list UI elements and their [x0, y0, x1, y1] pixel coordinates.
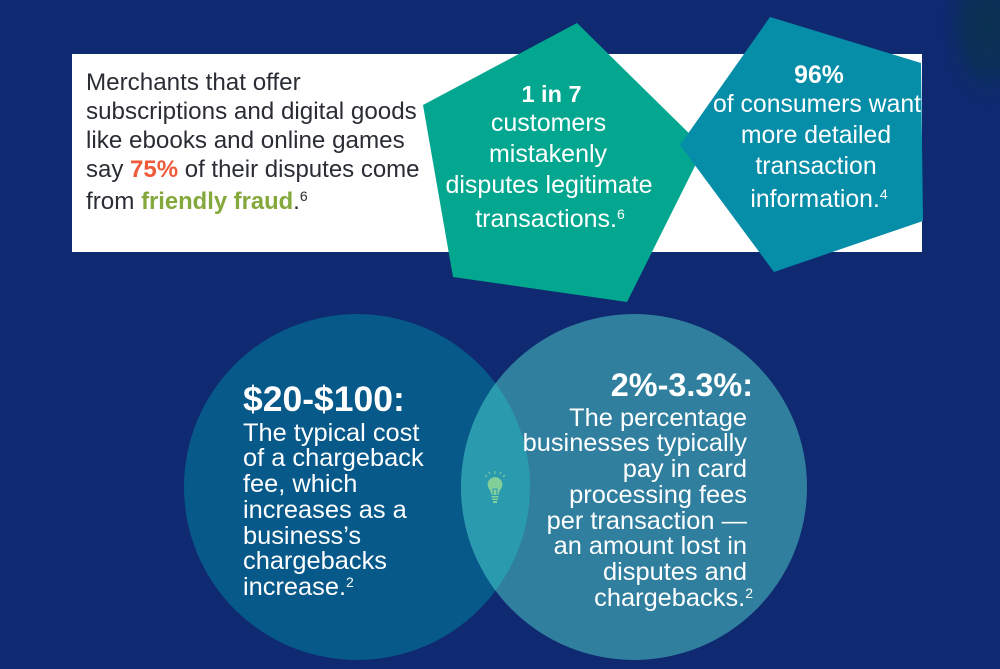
pentagon: 96% of consumers [680, 17, 923, 272]
pentagon text: 96% [794, 62, 844, 89]
chargeback text: $20-$100: [243, 379, 405, 419]
chargeback text: fee, which [243, 470, 357, 498]
pentagon text: transaction [755, 153, 877, 180]
chargeback text: chargebacks [243, 547, 387, 575]
pentagon text: 4 [880, 186, 888, 202]
processing fee text: The percentage [569, 404, 747, 432]
processing fee text: 2 [745, 585, 753, 601]
icon: light bulb [485, 471, 505, 503]
processing fee text: per transaction — [547, 507, 748, 535]
processing fee text: businesses typically [523, 429, 747, 457]
merchant text: Merchants that offer [86, 69, 301, 96]
chargeback text: The typical cost [243, 419, 419, 447]
chargeback text: of a chargeback [243, 444, 424, 472]
processing fee text: 2%-3.3%: [611, 367, 753, 403]
merchant text: from friendly fraud. [86, 188, 300, 215]
chargeback text: increases as a [243, 496, 408, 524]
pentagon text: information. [750, 186, 888, 213]
venn diagram [184, 314, 807, 660]
pentagon text: mistakenly [489, 140, 608, 168]
pentagon text: 6 [617, 206, 625, 222]
pentagon text: more detailed [741, 122, 891, 149]
circle: processing fees [461, 314, 807, 660]
processing fee text: pay in card [623, 455, 747, 483]
overlap lens [461, 384, 530, 590]
processing fee text: processing fees [569, 481, 747, 509]
chargeback text: increase. [243, 573, 354, 601]
pentagon text: of consumers want [713, 91, 921, 118]
circle: chargeback fee [184, 314, 530, 660]
processing fee text: disputes and [603, 558, 747, 586]
pentagon text: customers [491, 109, 606, 137]
chargeback text: business’s [243, 522, 361, 550]
merchant text: 6 [300, 188, 308, 204]
processing fee text: an amount lost in [554, 532, 747, 560]
processing fee text: chargebacks. [594, 584, 753, 612]
merchant text: subscriptions and digital goods [86, 98, 417, 125]
white panel: friendly fraud [72, 54, 922, 252]
pentagon text: disputes legitimate [445, 171, 653, 199]
pentagon text: 1 in 7 [521, 81, 582, 107]
merchant text: say 75% of their disputes come [86, 156, 420, 183]
pentagon: 1 in 7 customers [423, 23, 704, 302]
chargeback text: 2 [346, 574, 354, 590]
merchant text: like ebooks and online games [86, 127, 405, 154]
pentagon text: transactions. [475, 205, 625, 233]
